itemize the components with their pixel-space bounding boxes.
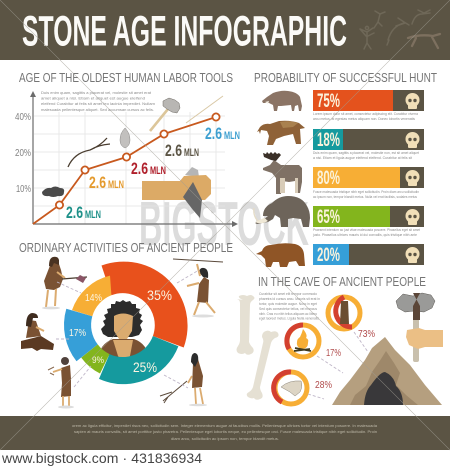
icon: ring fire bbox=[287, 325, 319, 357]
icon: cave paintings bbox=[360, 10, 440, 49]
icon: saber-tooth bbox=[257, 121, 305, 145]
connectors bbox=[308, 332, 368, 399]
icon: bear bbox=[256, 243, 305, 267]
captions bbox=[312, 112, 420, 237]
value labels: MLN bbox=[85, 209, 101, 221]
bars bbox=[313, 90, 424, 265]
icon: hand with arrowhead bbox=[142, 167, 211, 218]
icon: hand with stone axe bbox=[396, 293, 443, 362]
donut chart: 17% bbox=[69, 328, 86, 339]
panel: activities donut bbox=[19, 240, 233, 408]
donut chart: 14% bbox=[85, 293, 102, 304]
paragraph: labor tools bbox=[41, 91, 155, 112]
value labels: 2.6 bbox=[165, 142, 182, 160]
panel: labor tools chart bbox=[15, 70, 240, 227]
paragraph: cave: pharetra id cursus arcu. Mauris sit erat in bbox=[259, 297, 320, 301]
captions: a nisi. Etiam et ligula augue eleifend eleifend. Curabitur at felis sit bbox=[313, 156, 412, 160]
value labels: 2.6 bbox=[66, 204, 83, 222]
icon: person with club bbox=[42, 257, 87, 309]
icon: central person bbox=[101, 300, 146, 357]
value labels bbox=[66, 125, 240, 222]
paragraph: labor tools: malesuada pellentesque aliquet. Sed accumsan cursus ac felis. bbox=[41, 108, 154, 112]
icon: moose bbox=[263, 152, 302, 194]
segment 9% bbox=[81, 344, 110, 374]
axis labels bbox=[15, 112, 31, 195]
segment 25% bbox=[99, 336, 178, 384]
icon: ring trunk bbox=[328, 297, 360, 329]
percentages: 18% bbox=[317, 130, 340, 151]
icon: person with bow drill bbox=[48, 357, 74, 408]
icon: stone bbox=[42, 186, 64, 197]
value labels: MLN bbox=[150, 165, 166, 177]
paragraph: labor tools: Duis enim quam, sagittis a placerat vel, molestie sit amet erat bbox=[41, 91, 151, 95]
donut chart: 25% bbox=[133, 360, 157, 375]
axis labels: 40% bbox=[15, 112, 31, 123]
captions: Duis enim quam, sagittis a placerat vel, molestie non, est sit amet aliquet bbox=[313, 151, 419, 155]
paragraph: cave bbox=[259, 292, 320, 320]
captions: Fusce malesuada tristique nibh eget sollicitudin. Proin diam arcu sollicitudin bbox=[313, 190, 419, 194]
icon: spear bbox=[186, 96, 223, 123]
percentages: 20% bbox=[317, 245, 340, 266]
icon: boar bbox=[262, 91, 302, 111]
paragraph: cave: nibh. Cras eu nibh tellus aliquam ac libero bbox=[259, 312, 317, 316]
panel: cave bbox=[236, 274, 443, 405]
donut chart: 35% bbox=[147, 288, 172, 303]
panel: hunt probability bbox=[254, 70, 437, 267]
icon: person with branch bbox=[160, 353, 207, 406]
icons: skulls bbox=[406, 93, 420, 263]
percentages bbox=[317, 91, 340, 266]
icon: flint bbox=[120, 128, 130, 148]
icon: ring skull bbox=[274, 372, 307, 404]
icon: bone lower bbox=[247, 331, 279, 400]
percentages: 65% bbox=[317, 207, 340, 228]
footer text: diam arcu, sollicitudin ac ipsum non, tempor blandit metus. bbox=[171, 436, 279, 441]
axis labels: 10% bbox=[16, 184, 31, 195]
value labels: MLN bbox=[184, 147, 199, 159]
footer band bbox=[0, 416, 450, 450]
paragraph: labor tools: amet aliquet a nisi. Etiam et aliquet est augue eleifend bbox=[41, 96, 145, 100]
line series bbox=[33, 117, 216, 224]
value labels: MLN bbox=[224, 130, 240, 142]
icon: stick bbox=[68, 138, 110, 167]
captions: justo. Phasellus ultrices mauris id dui convallis, quis tristique nibh ante bbox=[312, 233, 417, 237]
donut chart bbox=[64, 262, 188, 384]
header band bbox=[0, 0, 450, 60]
captions: Lorem ipsum dolor sit amet, consectetur adipiscing elit. Curabitur viverra bbox=[313, 112, 418, 116]
icon: cave bbox=[332, 337, 442, 405]
icon: sitting person bbox=[21, 313, 54, 351]
segment 14% bbox=[72, 276, 111, 316]
source line: www.bigstock.com · 431836934 bbox=[1, 450, 202, 466]
dashed connectors bbox=[56, 270, 199, 388]
label 17%: 17% bbox=[326, 348, 341, 359]
segment 17% bbox=[64, 309, 98, 361]
footer text: orem ac ligula efficitur, imperdiet risus nec, sollicitudin sem. Integer elementum augue at faucibus mollis. Pellentesque ultrices tortor vel interdum posuere. In malesuada bbox=[72, 423, 378, 428]
axes bbox=[33, 94, 236, 224]
value labels: 2.6 bbox=[131, 160, 148, 178]
percentages: 75% bbox=[317, 91, 340, 112]
footer text bbox=[72, 423, 378, 441]
value labels: 2.6 bbox=[89, 174, 106, 192]
value labels: 2.6 bbox=[205, 125, 222, 143]
paragraph: cave: tortor, quis molestie augue. Nunc in eget bbox=[259, 302, 317, 306]
heading: activities: ORDINARY ACTIVITIES OF ANCIENT PEOPLE bbox=[19, 240, 233, 255]
icon: stone hammer bbox=[150, 98, 180, 131]
paragraph: cave: Sed quis consectetur tellus, vel rhoncus bbox=[259, 307, 317, 311]
paragraph: cave: eget laoreet metus. Ligula Nulla venenatis bbox=[259, 316, 319, 320]
captions: ac ipsum non, tempor blandit metus. Nulla vel erat facilisis, sodales metus bbox=[313, 195, 417, 199]
footer text: sapien at mauris convallis, sit amet porttitor justo pharetra. Pellentesque eget lobortis neque, eu pellentesque orci. Fusce malesuada tristique nibh eget sollicitudin. Proin bbox=[74, 429, 377, 434]
icon: bone upper bbox=[236, 295, 254, 355]
label 73%: 73% bbox=[358, 329, 375, 340]
captions: arcu metus, at egestas metus aliquam non. Donec lobortis venenatis bbox=[313, 117, 415, 121]
value labels: MLN bbox=[108, 179, 124, 191]
icon: person with spear bbox=[173, 259, 223, 318]
icon: mammoth bbox=[254, 196, 310, 227]
heading: labor tools: AGE OF THE OLDEST HUMAN LABOR TOOLS bbox=[19, 70, 233, 85]
captions: Praesent interdum ac just vitae malesuada posuere. Phasellus eget sit amet bbox=[313, 228, 420, 232]
paragraph: labor tools: eleifend Curabitur at felis sit amet leo lacinia imperdiet. Nullam bbox=[41, 102, 155, 106]
label 28%: 28% bbox=[315, 380, 332, 391]
donut chart: 9% bbox=[92, 355, 104, 365]
axis labels: 20% bbox=[15, 148, 31, 159]
paragraph: cave: Curabitur sit amet elit tempor commodo bbox=[259, 292, 317, 296]
segment 35% bbox=[102, 262, 188, 348]
percentages: 80% bbox=[317, 168, 340, 189]
